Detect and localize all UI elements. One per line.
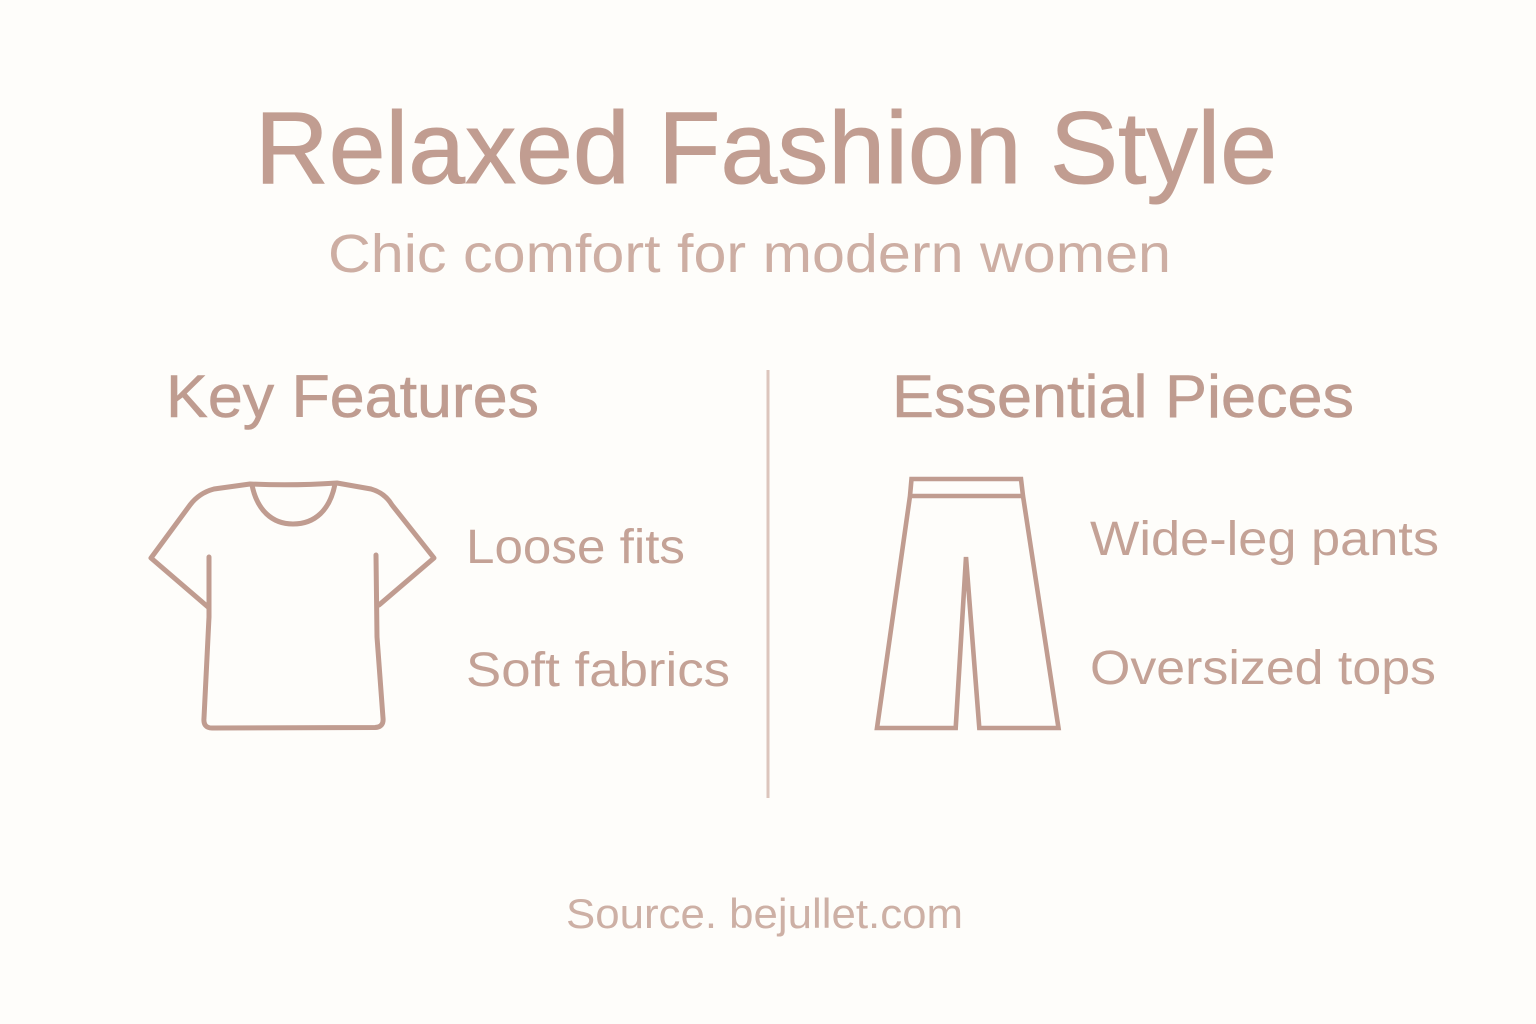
icon: t-shirt — [151, 483, 434, 728]
icon: wide-leg pants — [877, 479, 1058, 728]
subtitle: Chic comfort for modern women — [328, 224, 1171, 284]
heading: Key Features: Key Features — [166, 363, 539, 430]
source line: Source. bejullet.com — [566, 890, 963, 937]
text: Oversized tops: Oversized tops — [1090, 642, 1436, 695]
center divider — [766, 370, 770, 798]
text: Wide-leg pants: Wide-leg pants — [1090, 513, 1439, 566]
text: Soft fabrics: Soft fabrics — [466, 644, 730, 697]
title: Relaxed Fashion Style — [255, 91, 1277, 205]
text: Loose fits: Loose fits — [466, 521, 685, 574]
heading: Essential Pieces: Essential Pieces — [892, 363, 1354, 430]
